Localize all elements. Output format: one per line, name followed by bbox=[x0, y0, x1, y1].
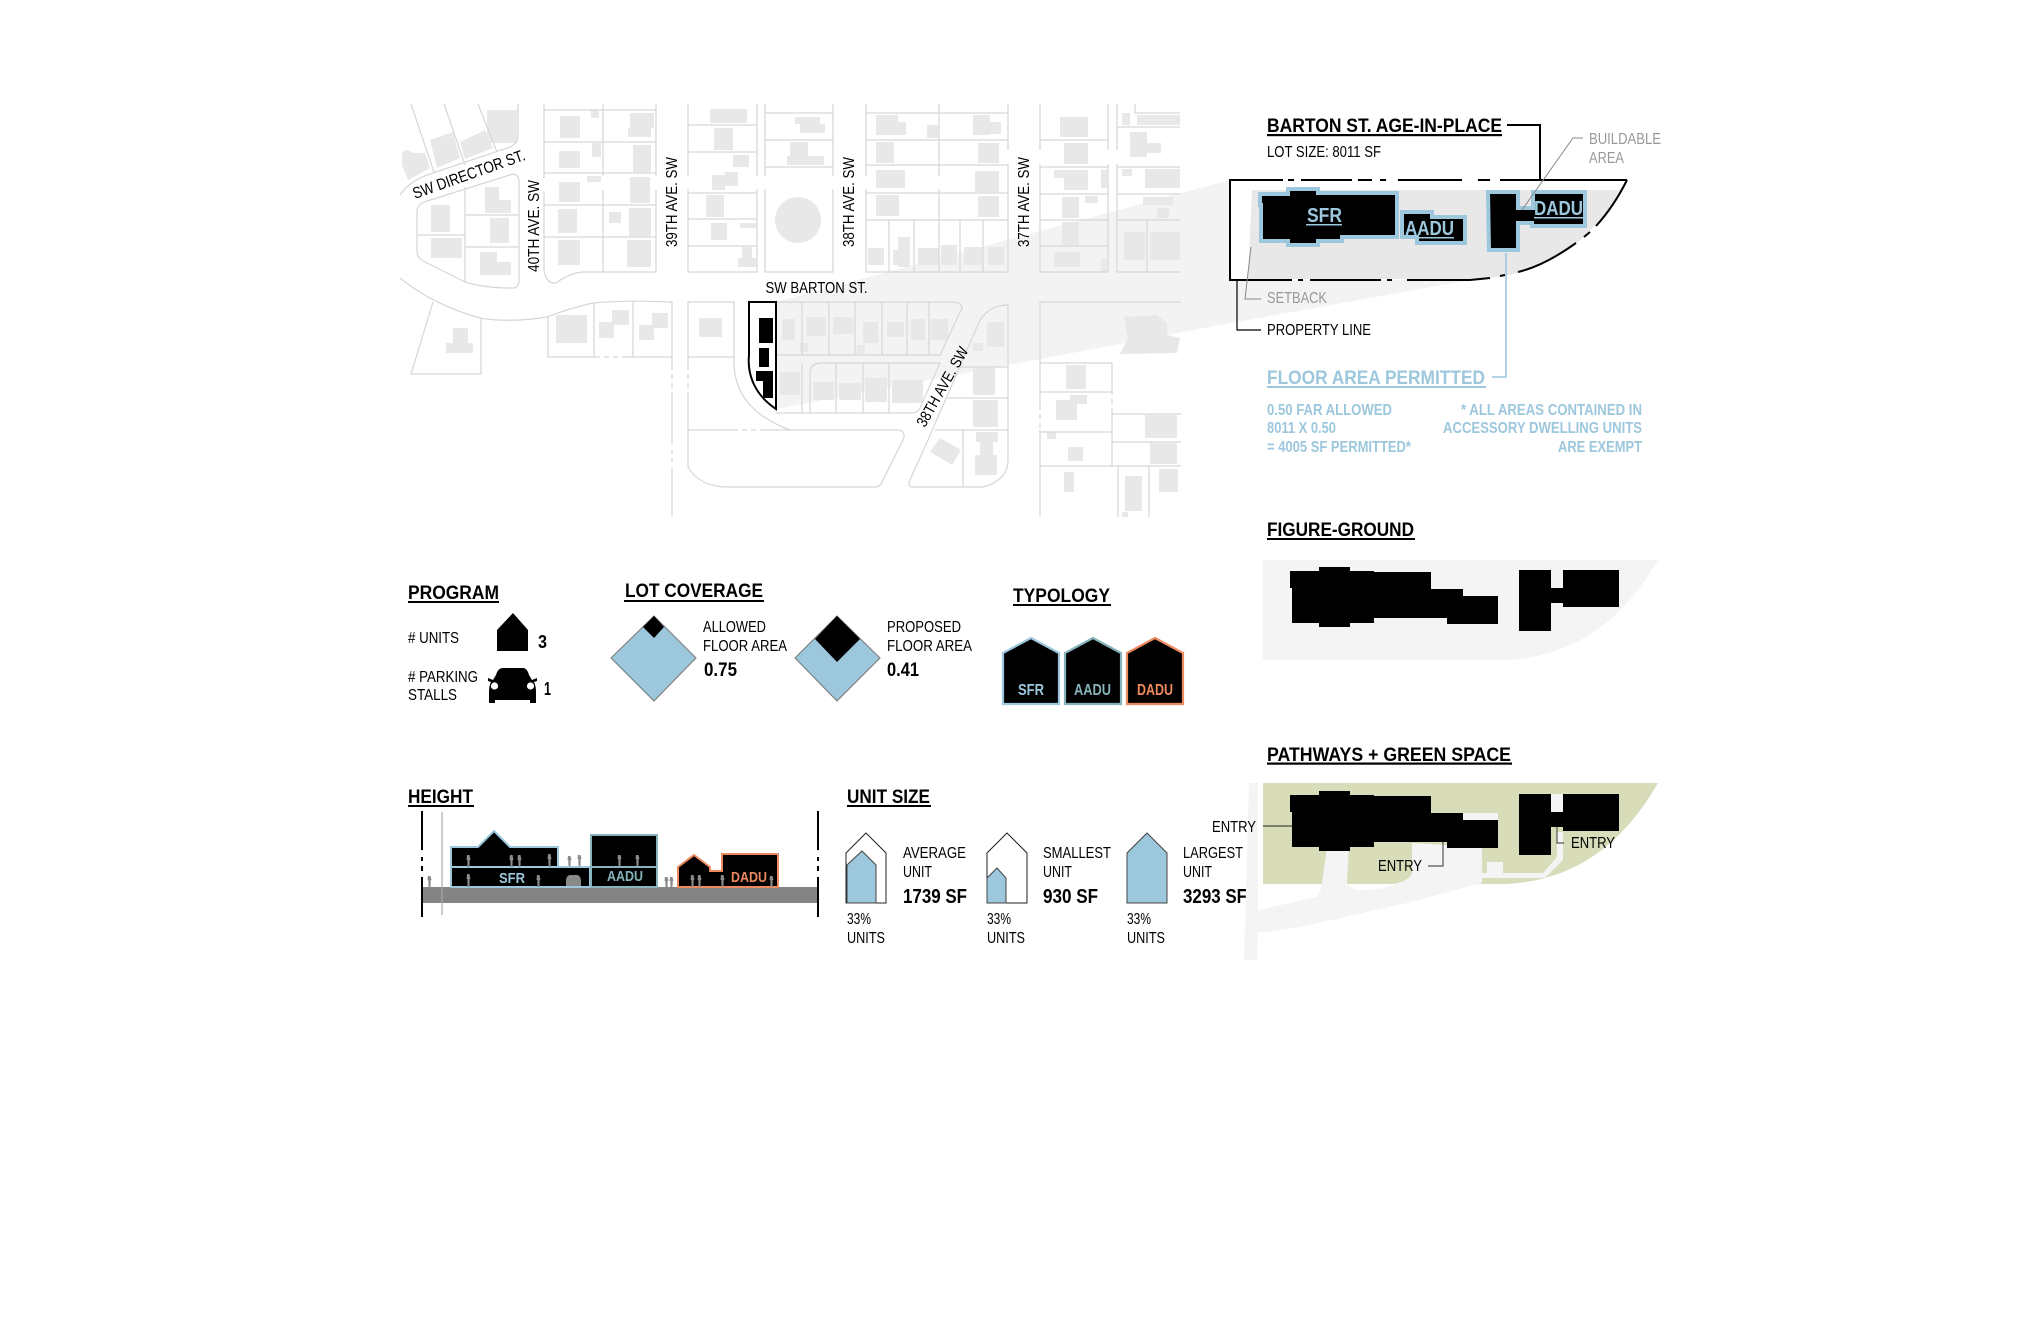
parking label: # PARKING bbox=[408, 669, 478, 686]
pathways bbox=[1244, 783, 1563, 960]
allowed floor area label: 0.75 bbox=[704, 660, 737, 681]
site buildings bbox=[756, 318, 773, 398]
average unit label: 1739 SF bbox=[903, 886, 967, 908]
DADU section bbox=[678, 854, 778, 887]
AADU footprint bbox=[1402, 212, 1465, 243]
exemption note: ACCESSORY DWELLING UNITS bbox=[1443, 420, 1642, 437]
setback callout: SETBACK bbox=[1267, 290, 1328, 307]
exemption note: ARE EXEMPT bbox=[1558, 439, 1642, 456]
floor area permitted heading: FLOOR AREA PERMITTED bbox=[1267, 367, 1485, 389]
street label: 40th Ave: 40TH AVE. SW bbox=[526, 180, 543, 272]
largest unit icon bbox=[1127, 833, 1167, 903]
floor area permitted heading bbox=[1267, 253, 1506, 389]
average unit label: UNIT bbox=[903, 864, 932, 881]
proposed floor area label: FLOOR AREA bbox=[887, 638, 973, 655]
title leader bbox=[1507, 125, 1540, 180]
panel: enlarged site plan bbox=[1230, 115, 1661, 456]
largest unit share: UNITS bbox=[1127, 930, 1165, 947]
floor area calculation: = 4005 SF PERMITTED* bbox=[1267, 439, 1412, 456]
site lot outline bbox=[749, 302, 776, 409]
smallest unit label bbox=[1043, 845, 1111, 908]
average unit label bbox=[903, 845, 967, 908]
panel: height section bbox=[408, 786, 818, 917]
SFR house bbox=[1003, 638, 1059, 704]
entry callout: west bbox=[1212, 819, 1292, 836]
figure-ground DADU bbox=[1519, 570, 1619, 631]
section car bbox=[566, 875, 581, 886]
smallest unit label: SMALLEST bbox=[1043, 845, 1111, 862]
SFR section: SFR bbox=[499, 870, 525, 887]
map circle feature bbox=[775, 197, 821, 243]
lot fill bbox=[1230, 180, 1627, 280]
plan DADU bbox=[1519, 794, 1619, 855]
allowed floor area label bbox=[703, 619, 788, 681]
parking label bbox=[408, 669, 478, 704]
street label: 38th Ave diagonal: 38TH AVE. SW bbox=[914, 344, 972, 430]
property limit lines bbox=[422, 811, 818, 917]
entry callout: DADU bbox=[1557, 827, 1615, 852]
panel: lot coverage bbox=[611, 580, 973, 701]
heading: Figure-Ground: FIGURE-GROUND bbox=[1267, 519, 1414, 541]
proposed floor area diamond bbox=[795, 616, 880, 701]
icon: car bbox=[488, 668, 537, 703]
panel: typology bbox=[1003, 585, 1183, 704]
setback line bbox=[441, 812, 443, 915]
allowed floor area label: ALLOWED bbox=[703, 619, 766, 636]
units label: # UNITS bbox=[408, 630, 459, 647]
street label: 39th Ave: 39TH AVE. SW bbox=[664, 157, 681, 247]
property line callout bbox=[1237, 280, 1371, 339]
average unit label: AVERAGE bbox=[903, 845, 966, 862]
parking label: STALLS bbox=[408, 687, 457, 704]
figure-ground plate bbox=[1263, 560, 1658, 660]
average unit share bbox=[847, 911, 885, 947]
entry callout: south: ENTRY bbox=[1378, 858, 1422, 875]
DADU house bbox=[1127, 638, 1183, 704]
property line callout: PROPERTY LINE bbox=[1267, 322, 1371, 339]
panel: figure-ground bbox=[1263, 519, 1658, 660]
largest unit label: UNIT bbox=[1183, 864, 1212, 881]
largest unit share: 33% bbox=[1127, 911, 1151, 928]
panel: pathways and green space bbox=[1212, 744, 1658, 960]
neighborhood site map bbox=[400, 104, 1181, 517]
map street dashes bbox=[600, 357, 1112, 470]
smallest unit label: UNIT bbox=[1043, 864, 1072, 881]
heading: Pathways + Green Space: PATHWAYS + GREEN SPACE bbox=[1267, 744, 1511, 766]
parking value: 1 bbox=[544, 679, 551, 699]
SFR footprint bbox=[1260, 189, 1397, 245]
buildable area callout bbox=[1522, 131, 1661, 210]
AADU section: AADU bbox=[607, 868, 643, 885]
largest unit label bbox=[1183, 845, 1247, 908]
buildable area bbox=[1248, 190, 1620, 279]
SFR section bbox=[451, 831, 590, 887]
map parcel and street lines bbox=[400, 104, 1181, 517]
entry callout: DADU: ENTRY bbox=[1571, 835, 1615, 852]
heading: Typology: TYPOLOGY bbox=[1013, 585, 1110, 607]
DADU label: DADU bbox=[1534, 198, 1583, 220]
projection fan from site to enlarged plan bbox=[776, 180, 1470, 409]
SFR label: SFR bbox=[1307, 205, 1342, 227]
street label: SW Director St: SW DIRECTOR ST. bbox=[411, 147, 528, 203]
green space plate bbox=[1263, 783, 1658, 884]
property line bbox=[1230, 180, 1627, 280]
street label: SW Barton St: SW BARTON ST. bbox=[766, 280, 868, 297]
exemption note bbox=[1443, 402, 1642, 456]
map building footprints bbox=[402, 109, 1180, 517]
largest unit label: LARGEST bbox=[1183, 845, 1243, 862]
AADU house bbox=[1065, 638, 1121, 704]
map street gaps bbox=[544, 150, 1117, 191]
title: Barton St. Age-in-Place: BARTON ST. AGE-IN-PLACE bbox=[1267, 115, 1502, 137]
lot size: LOT SIZE: 8011 SF bbox=[1267, 144, 1381, 161]
largest unit label: 3293 SF bbox=[1183, 886, 1247, 908]
SFR house: SFR bbox=[1018, 682, 1044, 699]
smallest unit icon bbox=[987, 833, 1027, 903]
exemption note: * ALL AREAS CONTAINED IN bbox=[1461, 402, 1642, 419]
buildable area callout: BUILDABLE bbox=[1589, 131, 1661, 148]
smallest unit label: 930 SF bbox=[1043, 886, 1098, 908]
largest unit share bbox=[1127, 911, 1165, 947]
average unit share: UNITS bbox=[847, 930, 885, 947]
entry callout: west: ENTRY bbox=[1212, 819, 1256, 836]
allowed floor area label: FLOOR AREA bbox=[703, 638, 788, 655]
heading: Unit Size: UNIT SIZE bbox=[847, 786, 930, 808]
heading: Program: PROGRAM bbox=[408, 582, 499, 604]
AADU label: AADU bbox=[1405, 218, 1454, 240]
AADU section bbox=[591, 835, 657, 887]
smallest unit share bbox=[987, 911, 1025, 947]
plan main buildings bbox=[1290, 791, 1498, 851]
ground bbox=[422, 887, 818, 903]
floor area calculation: 8011 X 0.50 bbox=[1267, 420, 1336, 437]
DADU section: DADU bbox=[731, 869, 767, 886]
street label: 38th Ave: 38TH AVE. SW bbox=[841, 157, 858, 247]
proposed floor area label bbox=[887, 619, 973, 681]
street label: 37th Ave: 37TH AVE. SW bbox=[1016, 157, 1033, 247]
smallest unit share: 33% bbox=[987, 911, 1011, 928]
average unit share: 33% bbox=[847, 911, 871, 928]
figure-ground main buildings bbox=[1290, 567, 1498, 627]
floor area calculation: 0.50 FAR ALLOWED bbox=[1267, 402, 1392, 419]
floor area calculation bbox=[1267, 402, 1412, 456]
panel: unit size bbox=[846, 786, 1247, 947]
allowed floor area diamond bbox=[611, 616, 696, 701]
average unit icon bbox=[846, 833, 886, 903]
buildable area callout: AREA bbox=[1589, 150, 1625, 167]
DADU house: DADU bbox=[1137, 682, 1173, 699]
heading: Height: HEIGHT bbox=[408, 786, 473, 808]
section people bbox=[428, 854, 774, 887]
heading: Lot Coverage: LOT COVERAGE bbox=[625, 580, 763, 602]
smallest unit share: UNITS bbox=[987, 930, 1025, 947]
DADU footprint bbox=[1488, 192, 1585, 250]
icon: house bbox=[497, 613, 528, 651]
panel: program bbox=[408, 582, 551, 704]
setback callout bbox=[1245, 247, 1328, 307]
proposed floor area label: 0.41 bbox=[887, 660, 919, 681]
AADU house: AADU bbox=[1074, 682, 1111, 699]
entry callout: south bbox=[1378, 842, 1443, 875]
proposed floor area label: PROPOSED bbox=[887, 619, 961, 636]
units value: 3 bbox=[538, 632, 547, 652]
